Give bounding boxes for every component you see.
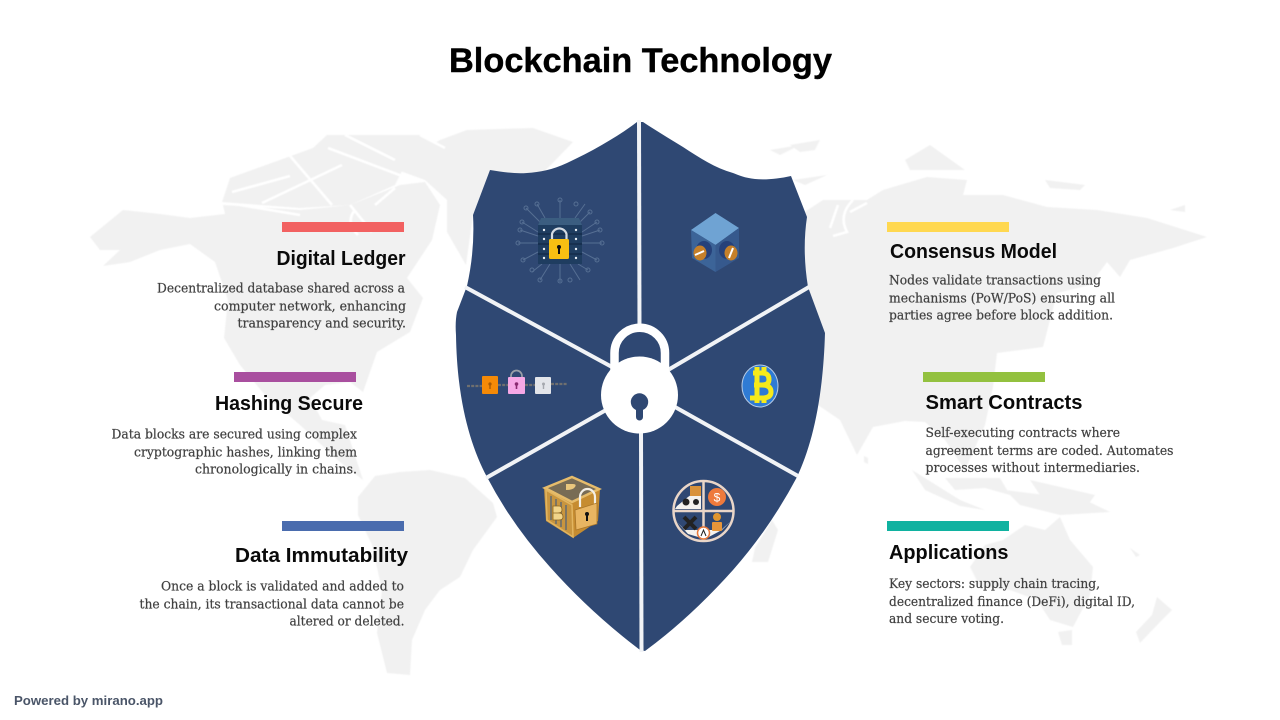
icon: bitcoin coin [742,365,778,407]
heading: Smart Contracts [926,392,1082,414]
icon: applications circle: $ [714,490,721,504]
central padlock [601,328,678,434]
footer credit: Powered by mirano.app [14,693,163,708]
shield dividers [465,120,809,652]
description: Once a block is validated and added to [161,580,404,594]
description: Nodes validate transactions using [889,274,1101,288]
accent bar [282,521,404,531]
description: processes without intermediaries. [926,461,1140,476]
panel: smart contracts [923,372,1174,476]
description: mechanisms (PoW/PoS) ensuring all [889,292,1115,306]
description: the chain, its transactional data cannot be [140,598,404,612]
description [112,428,358,478]
description: cryptographic hashes, linking them [134,446,357,460]
description: chronologically in chains. [195,462,357,478]
description: parties agree before block addition. [889,308,1113,324]
description: Data blocks are secured using complex [112,428,358,442]
description [889,577,1135,627]
icon: applications circle [674,481,734,541]
accent bar [282,222,404,232]
panel: consensus model [887,222,1115,324]
accent bar [887,521,1009,531]
heading: Data Immutability [235,545,409,567]
description [889,274,1115,324]
description [140,580,404,630]
icon: server lock [516,198,604,283]
heading: Applications [889,542,1008,564]
icon: gold bitcoin cube [544,476,600,538]
heading: Digital Ledger [276,248,406,270]
accent bar [234,372,356,382]
panel: digital ledger [157,222,406,332]
description: computer network, enhancing [214,300,406,314]
shield body [456,122,825,651]
description: Self-executing contracts where [926,426,1120,441]
description: decentralized finance (DeFi), digital ID, [889,595,1135,610]
accent bar [923,372,1045,382]
description: and secure voting. [889,612,1004,627]
shield [456,120,825,652]
description [926,426,1174,476]
description: Decentralized database shared across a [157,282,405,296]
panel: hashing secure [112,372,363,478]
description: transparency and security. [238,316,406,332]
heading: Consensus Model [890,241,1057,263]
description: Key sectors: supply chain tracing, [889,577,1100,592]
world map background [90,128,1207,675]
heading: Hashing Secure [215,393,363,415]
description [157,282,406,332]
title: Blockchain Technology [449,42,832,80]
panel: applications [887,521,1135,627]
panel: data immutability [140,521,409,630]
accent bar [887,222,1009,232]
icon: blue cube [691,213,739,272]
description: agreement terms are coded. Automates [926,444,1174,459]
description: altered or deleted. [290,614,404,630]
icon: chained locks [467,371,567,394]
